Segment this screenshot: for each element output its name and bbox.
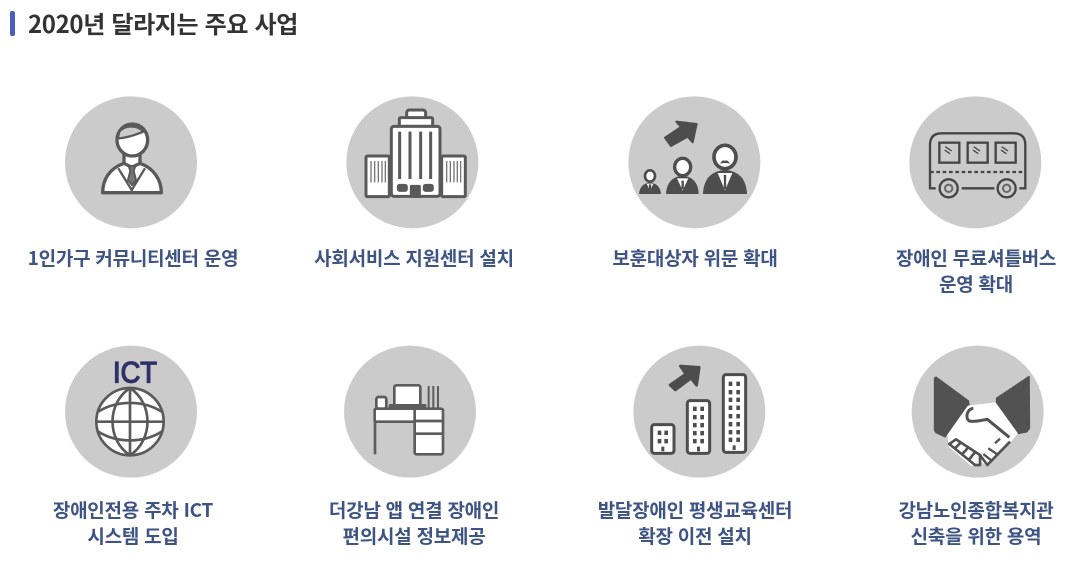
- label: 평생교육센터: 발달장애인 평생교육센터: [598, 496, 792, 523]
- label: 노인종합복지관: 강남노인종합복지관: [898, 496, 1054, 523]
- icon: ICT globe: [65, 346, 197, 478]
- label: ICT: [53, 496, 213, 549]
- label: 보훈대상자: 보훈대상자 위문 확대: [612, 244, 778, 271]
- label: 노인종합복지관: 신축을 위한 용역: [911, 522, 1041, 549]
- label: ICT: 시스템 도입: [87, 522, 179, 549]
- icon: ICT globe: ICT: [113, 357, 157, 390]
- label: 더강남 앱: 더강남 앱 연결 장애인: [329, 496, 499, 523]
- label: 사회서비스: 사회서비스 지원센터 설치: [314, 244, 514, 271]
- icon: growing buildings with arrow: [633, 346, 765, 478]
- label: 셔틀버스: 장애인 무료셔틀버스: [896, 244, 1056, 271]
- label: ICT: 장애인전용 주차 ICT: [53, 496, 213, 523]
- label: 1인가구: 1인가구 커뮤니티센터 운영: [28, 244, 238, 271]
- title bar accent: [10, 11, 15, 36]
- icon: desk with laptop: [344, 346, 476, 478]
- icon: office buildings: [346, 96, 478, 228]
- icon: person in suit: [65, 96, 197, 228]
- label: 평생교육센터: [598, 496, 792, 549]
- label: 더강남 앱: 편의시설 정보제공: [343, 522, 485, 549]
- icon: growing people with arrow: [628, 96, 760, 228]
- label: 노인종합복지관: [898, 496, 1054, 549]
- label: 평생교육센터: 확장 이전 설치: [638, 522, 752, 549]
- label: 더강남 앱: [329, 496, 499, 549]
- title: 2020년 달라지는 주요 사업: [28, 5, 298, 40]
- icon: shuttle bus: [909, 96, 1041, 228]
- icon: handshake: [912, 346, 1044, 478]
- label: 셔틀버스: 운영 확대: [939, 270, 1013, 297]
- label: 셔틀버스: [896, 244, 1056, 297]
